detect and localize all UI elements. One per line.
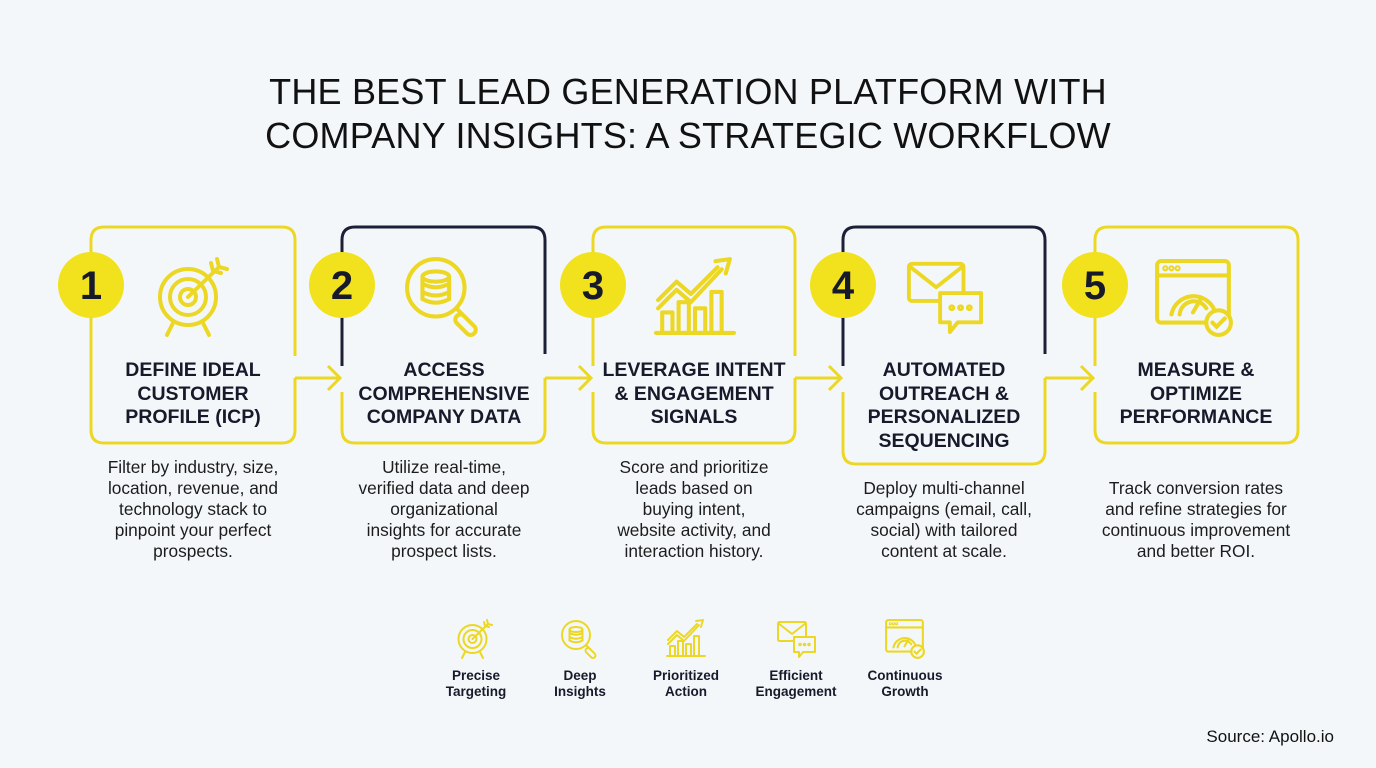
panel: step 1: DEFINE IDEAL (125, 359, 261, 381)
panel: step 3: leads based on (635, 478, 753, 498)
panel: step 3: Score and prioritize (620, 457, 768, 477)
benefit: precise targeting (446, 620, 506, 699)
benefit: continuous growth: Continuous (868, 668, 942, 683)
panel: step 4: OUTREACH & (879, 383, 1009, 405)
panel: step 2: COMPANY DATA (367, 406, 521, 428)
panel: step 5: continuous improvement (1102, 520, 1290, 540)
panel: step 2: Utilize real-time, (382, 457, 506, 477)
benefit: continuous growth: Growth (881, 684, 929, 699)
benefit: prioritized action: Prioritized (653, 668, 719, 683)
panel: step 5: 5 (1084, 264, 1106, 308)
benefit: precise targeting: Precise (452, 668, 501, 683)
panel: step 4: social) with tailored (871, 520, 1017, 540)
benefit: prioritized action: Action (665, 684, 707, 699)
panel: step 5: MEASURE & (1137, 359, 1255, 381)
panel: step 2: insights for accurate (367, 520, 521, 540)
panel: step 1: CUSTOMER (137, 383, 249, 405)
panel: step 3: & ENGAGEMENT (614, 383, 774, 405)
panel: step 3: website activity, and (616, 520, 771, 540)
panel: step 4: PERSONALIZED (868, 406, 1020, 428)
benefit: deep insights: Deep (563, 668, 597, 683)
arrow 3 to 4 (795, 366, 841, 390)
panel: step 2: verified data and deep (358, 478, 530, 498)
panel: step 4: campaigns (email, call, (856, 499, 1032, 519)
panel: step 4: content at scale. (881, 541, 1007, 561)
panel: step 2: 2 (331, 264, 353, 308)
panel: step 1: PROFILE (ICP) (125, 406, 261, 428)
panel: step 1 (58, 227, 295, 561)
panel: step 2: organizational (390, 499, 498, 519)
panel: step 5: OPTIMIZE (1150, 383, 1242, 405)
panel: step 2 (309, 227, 545, 561)
panel: step 1: location, revenue, and (108, 478, 278, 498)
benefit: deep insights (554, 621, 606, 699)
panel: step 1: 1 (80, 264, 102, 308)
panel: step 5 (1062, 227, 1298, 561)
benefit: continuous growth (868, 620, 942, 699)
panel: step 5: and better ROI. (1137, 541, 1255, 561)
benefit: efficient engagement: Efficient (769, 668, 823, 683)
panel: step 5: PERFORMANCE (1120, 406, 1272, 428)
panel: step 4: AUTOMATED (883, 359, 1005, 381)
title: COMPANY INSIGHTS: A STRATEGIC WORKFLOW (265, 115, 1111, 156)
benefit: efficient engagement: Engagement (755, 684, 837, 699)
panel: step 3: buying intent, (643, 499, 745, 519)
panel: step 1: pinpoint your perfect (115, 520, 271, 540)
panel: step 5: Track conversion rates (1109, 478, 1283, 498)
benefit: deep insights: Insights (554, 684, 606, 699)
panel: step 5: and refine strategies for (1105, 499, 1287, 519)
panel: step 4: 4 (832, 264, 855, 308)
panel: step 3: SIGNALS (651, 406, 737, 428)
title (265, 71, 1111, 156)
panel: step 3: 3 (582, 264, 604, 308)
panel: step 1: technology stack to (119, 499, 267, 519)
benefit: precise targeting: Targeting (446, 684, 506, 699)
arrow 4 to 5 (1045, 366, 1093, 390)
panel: step 3: LEVERAGE INTENT (602, 359, 786, 381)
arrow 1 to 2 (295, 366, 340, 390)
panel: step 2: COMPREHENSIVE (358, 383, 530, 405)
panel: step 1: prospects. (153, 541, 233, 561)
benefit: efficient engagement (755, 622, 837, 699)
panel: step 4: Deploy multi-channel (863, 478, 1025, 498)
panel: step 3 (560, 227, 795, 561)
panel: step 3: interaction history. (625, 541, 763, 561)
title: THE BEST LEAD GENERATION PLATFORM WITH (269, 71, 1107, 112)
source note: Source: Apollo.io (1206, 727, 1334, 746)
panel: step 4 (810, 227, 1045, 561)
panel: step 2: ACCESS (403, 359, 485, 381)
panel: step 2: prospect lists. (391, 541, 497, 561)
panel: step 1: Filter by industry, size, (108, 457, 278, 477)
arrow 2 to 3 (545, 366, 591, 390)
benefits row (446, 620, 942, 699)
panel: step 4: SEQUENCING (878, 430, 1010, 452)
benefit: prioritized action (653, 620, 719, 699)
